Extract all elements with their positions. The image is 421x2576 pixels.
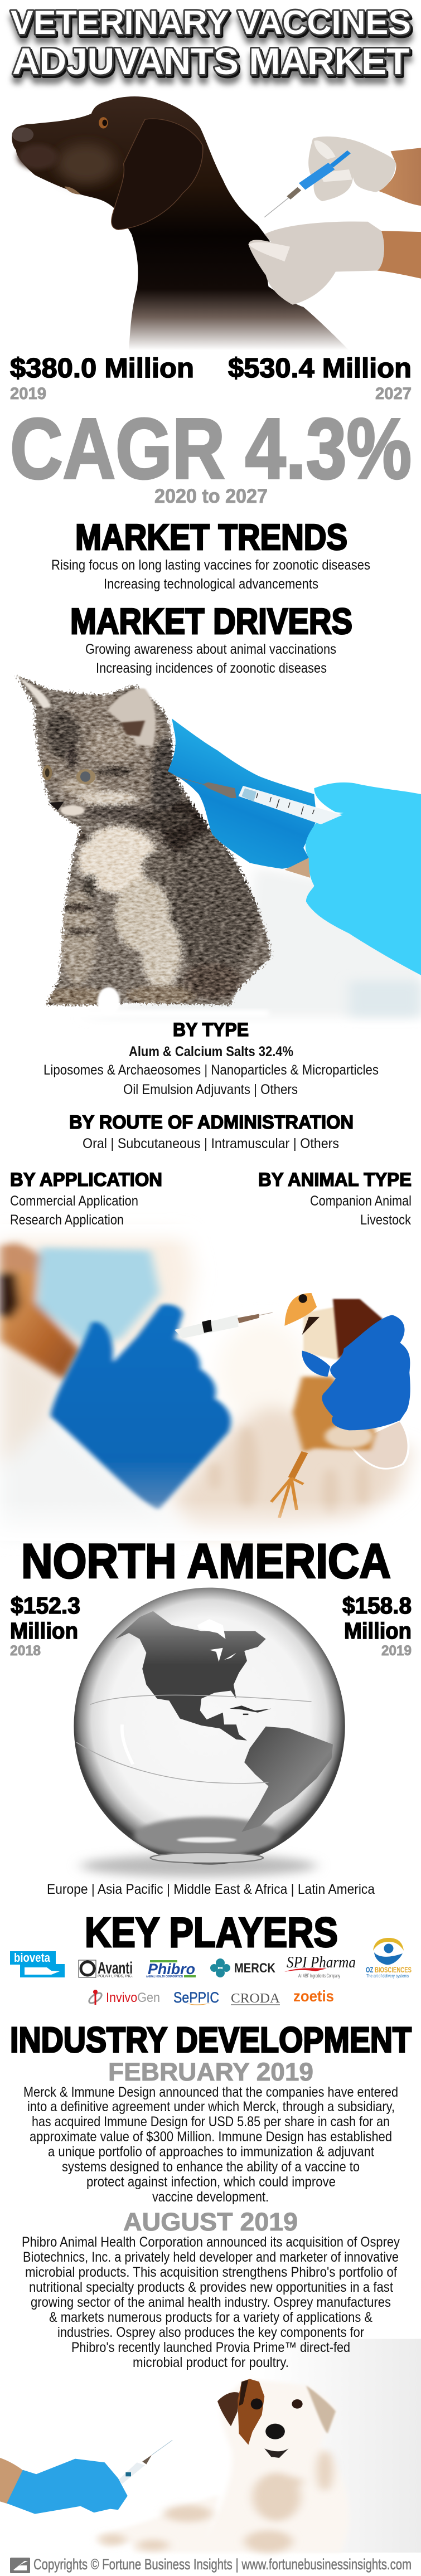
north america values: $152.3	[11, 1592, 80, 1618]
logo: bioveta: bioveta	[14, 1951, 51, 1965]
north america heading: NORTH AMERICA	[21, 1534, 391, 1588]
by application segment: BY APPLICATION	[10, 1169, 162, 1190]
by type segment: Oil Emulsion Adjuvants | Others	[123, 1082, 298, 1097]
by type segment	[43, 1019, 379, 1097]
syringe	[168, 774, 342, 824]
glass egg	[74, 1588, 345, 1865]
by route of administration segment	[69, 1112, 354, 1151]
logo: OZ Biosciences: The art of delivery systems	[366, 1974, 409, 1979]
South America	[241, 1727, 333, 1832]
logo: SPI Pharma	[284, 1954, 356, 1979]
bottom fade	[0, 1010, 269, 1017]
development: February 2019: FEBRUARY 2019	[108, 2058, 313, 2086]
logo: Merck: MERCK	[234, 1961, 276, 1976]
by application segment: Research Application	[10, 1212, 124, 1228]
title: VETERINARY VACCINES	[11, 4, 411, 41]
market trends: Increasing technological advancements	[104, 576, 318, 592]
bottom fade	[0, 1500, 421, 1540]
north america values: $158.8	[342, 1592, 412, 1618]
logo: Avanti: POLAR LIPIDS, INC.	[98, 1975, 133, 1979]
market size values: 2027	[375, 385, 412, 403]
north america values: Million	[344, 1618, 412, 1644]
syringe	[175, 1313, 273, 1338]
icon: Fortune Business Insights logo	[10, 2558, 30, 2573]
market trends: Rising focus on long lasting vaccines for zoonotic diseases	[51, 557, 370, 573]
development: February 2019: a unique portfolio of approaches to immunization & adjuvant	[48, 2144, 374, 2160]
illustration: kitten receiving vaccine	[0, 669, 421, 1017]
market trends	[51, 517, 370, 592]
globe illustration	[74, 1588, 345, 1877]
logos	[10, 1938, 412, 2006]
gap between paws	[98, 987, 120, 1015]
by type segment: BY TYPE	[173, 1019, 249, 1041]
title: ADJUVANTS MARKET	[12, 41, 409, 82]
by animal type segment: BY ANIMAL TYPE	[258, 1169, 412, 1190]
north america values: Million	[10, 1618, 78, 1644]
development: August 2019: microbial product for poultry.	[133, 2355, 289, 2370]
development: February 2019	[23, 2058, 398, 2205]
blue glove holding chicken	[302, 1315, 410, 1430]
logo: Phibro: ANIMAL HEALTH CORPORATION	[146, 1975, 183, 1979]
dog silhouette	[12, 96, 349, 350]
development: February 2019: vaccine development.	[152, 2189, 269, 2205]
kitten face details	[17, 675, 156, 815]
market drivers: MARKET DRIVERS	[70, 601, 352, 641]
globe shadow	[80, 1855, 317, 1877]
development: August 2019: & markets numerous products for a variety of applications &	[49, 2310, 372, 2325]
CAGR: 2020 to 2027	[154, 485, 268, 507]
north america values	[10, 1592, 412, 1659]
development: February 2019: systems designed to enhance the ability of a vaccine to	[62, 2159, 360, 2175]
illustration: white dog and gloved hand with syringe	[0, 2339, 421, 2553]
blue glove holding syringe	[51, 1305, 231, 1510]
title	[11, 4, 411, 82]
syringe	[264, 152, 349, 217]
front blue glove	[306, 782, 421, 975]
by animal type segment: Livestock	[360, 1212, 411, 1228]
by animal type segment	[258, 1169, 412, 1228]
logo: Croda: CRODA	[231, 1991, 280, 2006]
glass base	[134, 1817, 279, 1863]
soft background	[0, 2339, 421, 2553]
Caribbean islands	[230, 1705, 271, 1715]
white dog	[97, 2379, 349, 2553]
by type segment: Liposomes & Archaeosomes | Nanoparticles & Microparticles	[43, 1062, 379, 1078]
development: August 2019: AUGUST 2019	[123, 2208, 298, 2236]
logo: Seppic: SePPIC	[173, 1989, 219, 2006]
footer	[10, 2556, 412, 2573]
vet face and neck	[0, 1241, 159, 1381]
key players heading: KEY PLAYERS	[85, 1909, 338, 1956]
blue glove	[7, 2459, 128, 2514]
wrist	[284, 858, 310, 878]
logo: Merck	[210, 1958, 276, 1977]
table surface	[80, 868, 421, 1017]
back blue glove	[168, 718, 317, 869]
north america values: 2018	[10, 1643, 41, 1659]
logo: OZ Biosciences	[366, 1938, 412, 1979]
illustration: vet vaccinating chicken	[0, 1224, 421, 1540]
market drivers: Increasing incidences of zoonotic diseases	[96, 660, 327, 676]
blurred coat background	[0, 1231, 411, 1538]
logo: Zoetis: zoetis	[293, 1987, 334, 2005]
market size values: $530.4 Million	[228, 353, 412, 383]
by application segment: Commercial Application	[10, 1193, 138, 1209]
by route of administration segment: Oral | Subcutaneous | Intramuscular | Others	[83, 1136, 339, 1151]
development: August 2019	[22, 2208, 400, 2370]
logo: Avanti	[79, 1959, 133, 1979]
chicken	[271, 1293, 383, 1518]
cuff of coat	[349, 1420, 409, 1469]
glass highlights	[122, 1724, 133, 1765]
by type segment: Alum & Calcium Salts 32.4%	[129, 1044, 293, 1059]
top fade	[0, 1224, 421, 1248]
other regions: Europe | Asia Pacific | Middle East & Africa | Latin America	[47, 1882, 375, 1897]
logo: SPI Pharma: An ABF Ingredients Company	[298, 1973, 340, 1979]
development: February 2019: protect against infection, which could improve	[86, 2174, 336, 2190]
development: August 2019: Phibro's recently launched Provia Prime™ direct-fed	[71, 2340, 350, 2355]
by application segment	[10, 1169, 162, 1228]
logo: Avanti: Avanti	[98, 1959, 133, 1977]
market drivers	[70, 601, 352, 676]
glass cracks	[76, 1695, 312, 1783]
logo: SPI Pharma: SPI Pharma	[287, 1954, 356, 1971]
forearm	[0, 2458, 23, 2504]
illustration: dog receiving vaccine	[12, 96, 421, 350]
sleeve folds	[209, 1426, 369, 1516]
Hudson Bay and lakes	[197, 1619, 236, 1662]
kitten	[14, 674, 274, 1007]
market size values: 2019	[10, 385, 46, 403]
north america values: 2019	[381, 1643, 412, 1659]
development: August 2019: industries. Osprey also produces the key components for	[57, 2325, 364, 2340]
market size values	[10, 353, 412, 403]
market drivers: Growing awareness about animal vaccinations	[85, 641, 336, 657]
logo: bioveta	[10, 1951, 65, 1977]
market trends: MARKET TRENDS	[75, 517, 347, 557]
logo: InvivoGen: InvivoGen	[106, 1990, 160, 2005]
by route of administration segment: BY ROUTE OF ADMINISTRATION	[69, 1112, 354, 1133]
logo: Phibro: Phibro	[148, 1961, 195, 1977]
lower gloved hand and arm	[248, 221, 421, 305]
syringe	[118, 2440, 172, 2484]
North America	[115, 1611, 266, 1741]
logo: InvivoGen	[88, 1990, 160, 2005]
upper gloved hand and arm	[308, 137, 421, 206]
market size values: $380.0 Million	[10, 353, 194, 383]
